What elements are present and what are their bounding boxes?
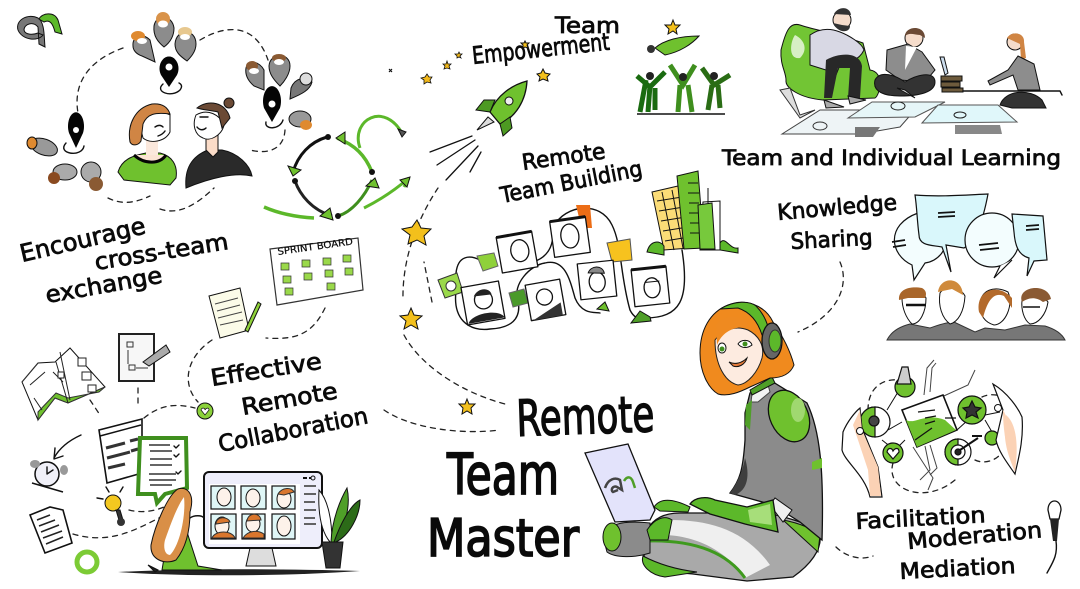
text: remote team building: Remote: [520, 139, 607, 176]
torso: [730, 377, 822, 540]
speech bubbles: [892, 194, 1047, 280]
text: encourage cross-team exchange: Encourage: [17, 212, 148, 268]
title: remote team master: Team: [446, 443, 559, 508]
top-view people clusters: [27, 12, 312, 191]
title: remote team master: Master: [427, 509, 580, 569]
city skyline: [647, 171, 738, 255]
desk: [118, 569, 360, 575]
paper document: [30, 507, 72, 553]
green heart badge: [197, 403, 213, 419]
text: effective remote collaboration: Remote: [240, 378, 340, 421]
section: character with laptop: [585, 302, 822, 581]
section: team and individual learning: [721, 8, 1062, 170]
green checklist speech bubble: [138, 438, 187, 503]
video frames: [461, 217, 670, 325]
sprint board: [270, 237, 363, 305]
connector line: [456, 208, 685, 329]
dashed orbit: [868, 380, 1008, 493]
woman from behind at desk: [148, 488, 222, 572]
woman with green top: [118, 104, 176, 185]
map pin: right: [263, 86, 283, 128]
text: effective remote collaboration: Effective: [209, 349, 324, 392]
dashed connector: [836, 547, 873, 558]
folded map: [22, 348, 105, 420]
text: team empowerment: Empowerment: [471, 28, 611, 70]
text: facilitation moderation mediation: Mediation: [899, 554, 1016, 585]
left hand: [842, 408, 882, 497]
map pin: left: [64, 112, 84, 153]
bearded man seated: [810, 8, 866, 108]
sprint board: SPRINT BOARD: [277, 237, 354, 258]
text: facilitation moderation mediation: Moderation: [906, 518, 1043, 555]
woman seated on floor: [988, 33, 1046, 108]
diagram sketch card: [119, 334, 170, 381]
text: knowledge sharing: [776, 191, 898, 255]
text: team and individual learning: Team and Individual Learning: [721, 146, 1061, 170]
text: remote team building: Team Building: [497, 157, 644, 209]
dashed rocket trails: [384, 188, 505, 432]
text: effective remote collaboration: [209, 349, 370, 458]
arrow to alarm clock: [54, 435, 81, 459]
section: remote team building: [438, 139, 738, 329]
man with laptop on floor: [875, 28, 963, 98]
right hand: [993, 384, 1022, 474]
green bean bag: [781, 24, 880, 100]
microphone: [1047, 501, 1061, 573]
text: facilitation moderation mediation: Facilitation: [855, 503, 986, 535]
text: encourage cross-team exchange: exchange: [44, 263, 164, 309]
title: remote team master: Remote: [515, 385, 655, 448]
alarm clock: [30, 460, 68, 492]
map pin: top: [159, 57, 182, 94]
forearm and green glove: [654, 498, 792, 532]
section: facilitation moderation mediation: [836, 360, 1061, 585]
central green card: [902, 395, 957, 447]
green ring: [77, 552, 97, 572]
small stars near rocket: [389, 52, 462, 84]
puzzle pieces: [438, 205, 651, 323]
section: encourage cross-team exchange: [17, 12, 312, 309]
logo: [18, 14, 62, 47]
rocket with motion lines: [430, 81, 527, 180]
stars on trail: [400, 220, 475, 414]
man with black top: [186, 98, 252, 188]
document list: [99, 419, 142, 483]
text: knowledge sharing: Knowledge: [776, 191, 898, 226]
floor with papers: [780, 88, 1062, 137]
four people: [887, 280, 1065, 340]
face: [715, 317, 763, 385]
text: knowledge sharing: Sharing: [790, 226, 873, 255]
legs: [644, 513, 820, 581]
light bulb: [97, 487, 125, 526]
headset: [720, 302, 782, 359]
computer monitor with video call: [204, 472, 322, 566]
circuit lines: [882, 360, 1000, 490]
text: effective remote collaboration: Collaboration: [216, 403, 370, 458]
text: encourage cross-team exchange: cross-team: [93, 229, 230, 276]
icon: team cheering: [521, 20, 730, 114]
green shoulder pad: [760, 383, 822, 470]
green boots: [603, 518, 697, 577]
cycle arrows: [264, 116, 410, 220]
dashed connectors: [73, 308, 325, 538]
title: remote team master: [427, 385, 655, 569]
text: encourage cross-team exchange: [17, 212, 230, 309]
notepad and pencil: [209, 288, 261, 338]
dashed connector: [798, 262, 843, 332]
section: team empowerment: [471, 14, 730, 114]
section: knowledge sharing: [776, 191, 1065, 340]
hair back: [700, 302, 794, 395]
laptop: [585, 444, 655, 522]
dashed connection loops: [77, 30, 285, 211]
icon circles: [860, 367, 999, 465]
potted plant: [319, 488, 360, 568]
text: facilitation moderation mediation: [855, 503, 1043, 585]
section: effective remote collaboration: [22, 237, 370, 575]
text: team empowerment: Team: [554, 14, 620, 39]
